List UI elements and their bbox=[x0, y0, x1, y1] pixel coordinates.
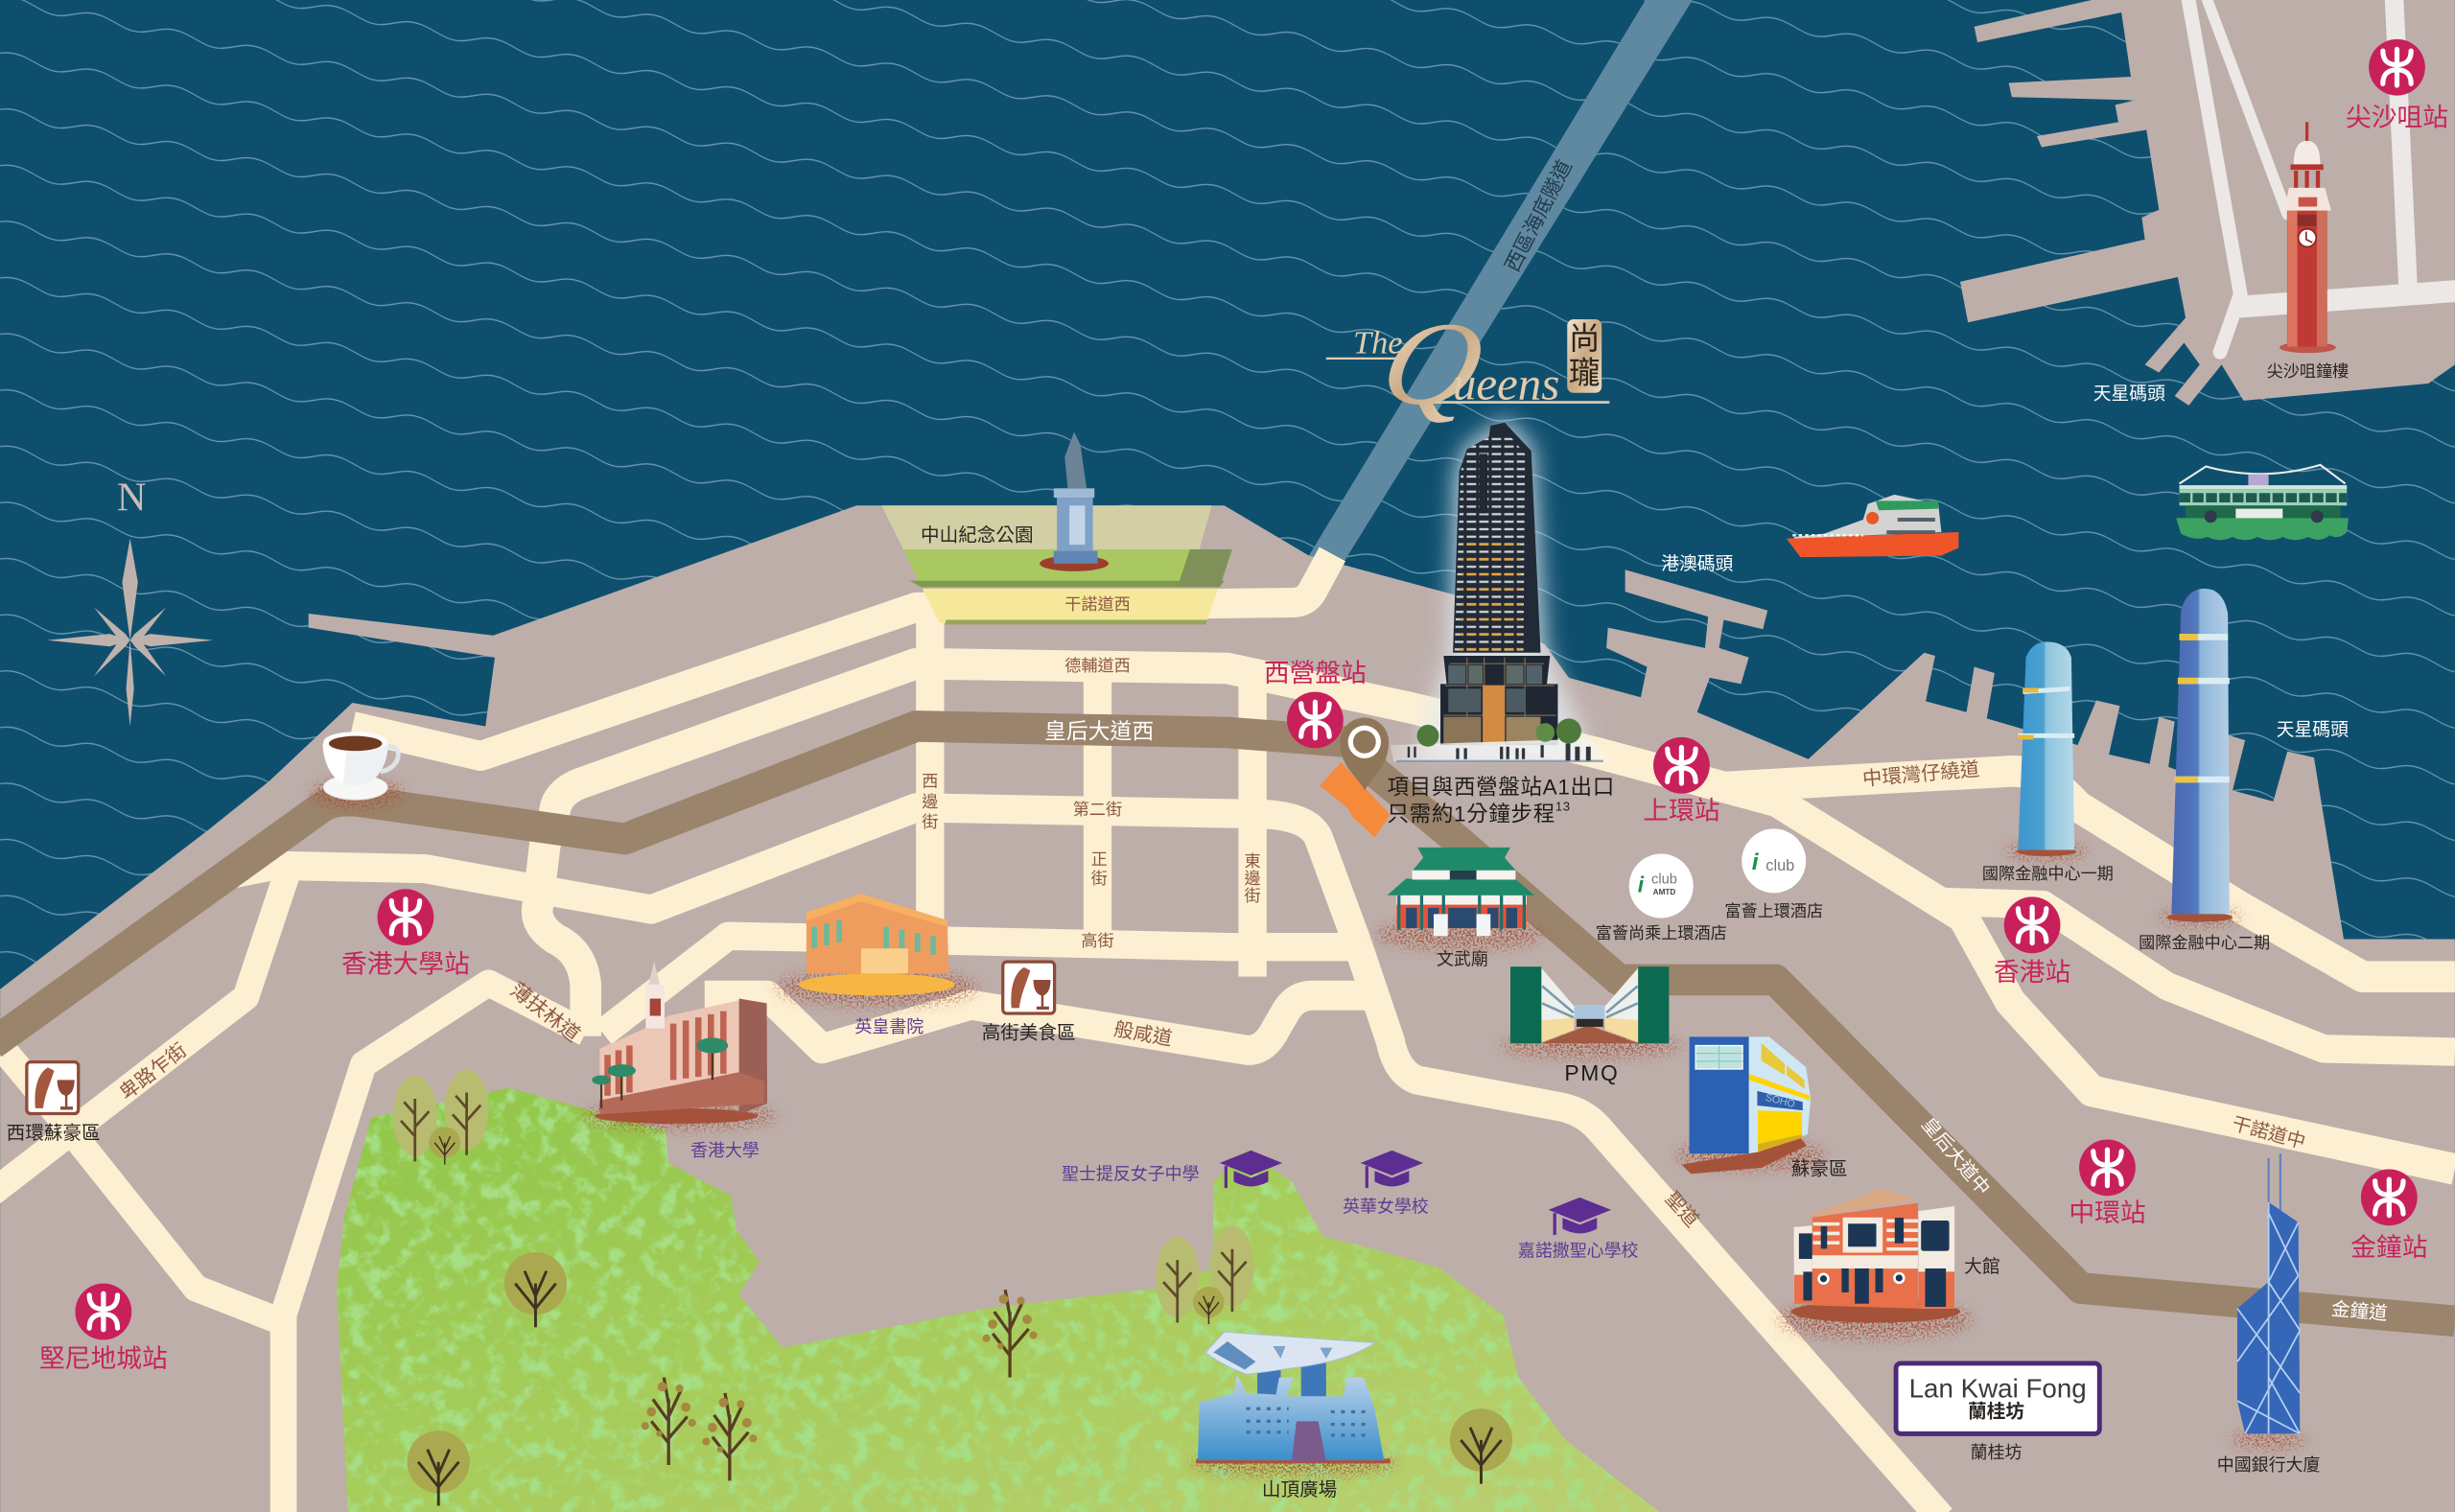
MTR station: Admiralty: 金鐘站 bbox=[2350, 1233, 2427, 1262]
landmark: IFC Two: 國際金融中心二期 bbox=[2139, 933, 2270, 952]
compass rose bbox=[47, 476, 213, 726]
landmark: Bank of China Tower: 中國銀行大廈 bbox=[2217, 1455, 2320, 1475]
landmark: Man Mo Temple: 文武廟 bbox=[1437, 950, 1488, 969]
tower: The Queens building bbox=[1417, 416, 1589, 752]
landmark: IFC One bbox=[1982, 641, 2114, 883]
landmark: Tsim Sha Tsui Clock Tower bbox=[2267, 122, 2349, 381]
landmark: IFC One: 國際金融中心一期 bbox=[1982, 864, 2114, 883]
road labels: 高街 bbox=[1081, 931, 1114, 950]
road labels: 正 bbox=[1091, 849, 1108, 869]
MTR station: Hong Kong: 香港站 bbox=[1994, 958, 2070, 987]
road labels: 干諾道西 bbox=[1064, 594, 1131, 614]
MTR station: Central: 中環站 bbox=[2069, 1198, 2146, 1227]
MTR station: Kennedy Town bbox=[39, 1284, 168, 1373]
landmark: Tai Kwun: 大館 bbox=[1964, 1256, 2000, 1276]
school: St Stephen's Girls: 聖士提反女子中學 bbox=[1062, 1164, 1200, 1183]
road network bbox=[0, 554, 2455, 1512]
hotel logo: iclub Sheung Wan: i bbox=[1752, 849, 1760, 875]
callout: walking distance bbox=[1388, 776, 1615, 826]
road labels: 西 bbox=[922, 772, 938, 791]
logo: The Queens 尚瓏: The bbox=[1353, 325, 1402, 361]
road labels: 皇后大道西 bbox=[1044, 718, 1154, 743]
place labels on water and land: 天星碼頭 bbox=[2093, 383, 2165, 403]
landmark: SoHo: 蘇豪區 bbox=[1791, 1158, 1847, 1179]
MTR station: Sai Ying Pun bbox=[1264, 659, 1367, 748]
road labels: 卑路乍街 bbox=[116, 1039, 191, 1105]
landmark: Tsim Sha Tsui Clock Tower: 尖沙咀鐘樓 bbox=[2267, 361, 2349, 381]
MTR station: Kennedy Town: 堅尼地城站 bbox=[39, 1344, 168, 1373]
logo sign: Lan Kwai Fong bbox=[1896, 1363, 2099, 1462]
road labels: 皇后大道中 bbox=[1917, 1114, 1994, 1199]
MTR station: HKU bbox=[341, 889, 470, 979]
road labels: 干諾道中 bbox=[2230, 1113, 2307, 1153]
road labels: 西區海底隧道 bbox=[1501, 156, 1577, 275]
western harbour tunnel band bbox=[1309, 0, 1693, 572]
hotel logo: iclub AMTD: AMTD bbox=[1653, 888, 1675, 896]
icon: SoHo West food area: 西環蘇豪區 bbox=[7, 1123, 101, 1144]
statue: Sun Yat Sen bbox=[1040, 432, 1109, 571]
school: Sacred Heart Canossian bbox=[1518, 1198, 1639, 1260]
MTR station: Admiralty bbox=[2350, 1169, 2427, 1262]
hotel logo: iclub AMTD: 富薈尚乘上環酒店 bbox=[1596, 923, 1727, 942]
icon: High Street food area bbox=[982, 962, 1076, 1043]
land: Hong Kong Island bbox=[0, 505, 2455, 1512]
hotel logo: iclub AMTD bbox=[1596, 854, 1727, 942]
Sun Yat Sen park strips bbox=[881, 505, 1232, 624]
MTR station: Sheung Wan bbox=[1643, 737, 1720, 826]
landmark: Bank of China Tower bbox=[2217, 1153, 2320, 1475]
landmark: Peak Galleria: 山頂廣場 bbox=[1262, 1479, 1337, 1500]
MTR station: Central bbox=[2069, 1139, 2146, 1227]
icon: High Street food area: 高街美食區 bbox=[982, 1022, 1076, 1043]
boat: Star Ferry bbox=[2176, 465, 2349, 540]
road labels: 街 bbox=[1091, 869, 1108, 888]
landmark: King's College bbox=[777, 894, 977, 1036]
icon: coffee cup bbox=[310, 732, 404, 809]
landmark: PMQ: PMQ bbox=[1564, 1060, 1619, 1085]
landmark: Peak Galleria bbox=[1190, 1332, 1396, 1500]
hotel logo: iclub AMTD: club bbox=[1651, 872, 1677, 887]
road labels: 第二街 bbox=[1073, 800, 1122, 819]
callout: walking distance: 13 bbox=[1555, 799, 1571, 813]
hotel logo: iclub Sheung Wan: club bbox=[1765, 857, 1794, 874]
road labels: 街 bbox=[922, 812, 938, 831]
road labels bbox=[116, 156, 2389, 1325]
road labels: 邊 bbox=[922, 792, 938, 811]
landmark: SoHo bbox=[1675, 1036, 1847, 1179]
logo: The Queens 尚瓏 bbox=[1326, 297, 1609, 430]
logo: The Queens 尚瓏: Q bbox=[1370, 297, 1495, 430]
landmark: University of Hong Kong bbox=[582, 961, 777, 1160]
project site marker bbox=[1320, 718, 1391, 837]
landmark: SoHo: SOHO bbox=[1765, 1092, 1796, 1110]
landmark: King's College: 英皇書院 bbox=[855, 1017, 924, 1036]
road labels: 聖道 bbox=[1661, 1188, 1703, 1231]
landmark: Man Mo Temple bbox=[1376, 848, 1545, 969]
MTR station: HKU: 香港大學站 bbox=[341, 950, 470, 979]
place labels on water and land: 中山紀念公園 bbox=[921, 523, 1034, 546]
Queen's Road brown main road bbox=[0, 726, 2455, 1321]
school: St Stephen's Girls bbox=[1062, 1151, 1282, 1188]
compass rose: N bbox=[117, 476, 147, 521]
icon: SoHo West food area bbox=[7, 1062, 101, 1144]
place labels on water and land: 天星碼頭 bbox=[2277, 719, 2349, 739]
school: Ying Wa Girls: 英華女學校 bbox=[1343, 1198, 1429, 1217]
landmark: Tai Kwun bbox=[1779, 1189, 2000, 1339]
road labels: 金鐘道 bbox=[2330, 1299, 2389, 1325]
land: Kowloon peninsula bbox=[1960, 0, 2455, 406]
hotel logo: iclub Sheung Wan bbox=[1724, 828, 1823, 920]
logo sign: Lan Kwai Fong: 蘭桂坊 bbox=[1968, 1401, 2024, 1423]
road labels: 般咸道 bbox=[1112, 1018, 1174, 1050]
landmark: PMQ bbox=[1500, 966, 1681, 1085]
school: Ying Wa Girls bbox=[1343, 1151, 1429, 1217]
MTR station: Sheung Wan: 上環站 bbox=[1643, 797, 1720, 826]
road labels: 東 bbox=[1245, 851, 1261, 871]
callout: walking distance: 只需約1分鐘步程 bbox=[1388, 802, 1555, 826]
MTR station: Sai Ying Pun: 西營盤站 bbox=[1264, 659, 1367, 687]
landmark: IFC Two bbox=[2139, 589, 2270, 952]
MTR station: Hong Kong bbox=[1994, 896, 2070, 987]
boat: turbojet ferry bbox=[1787, 495, 1958, 557]
logo: The Queens 尚瓏: 瓏 bbox=[1569, 355, 1601, 390]
Kowloon roads bbox=[2187, 0, 2455, 352]
logo sign: Lan Kwai Fong: Lan Kwai Fong bbox=[1909, 1374, 2087, 1404]
place labels on water and land: 港澳碼頭 bbox=[1661, 553, 1734, 573]
logo: The Queens 尚瓏: ueens bbox=[1453, 357, 1559, 409]
plaza with trees and people bbox=[1391, 718, 1614, 762]
hotel logo: iclub AMTD: i bbox=[1638, 872, 1645, 896]
school: Sacred Heart Canossian: 嘉諾撒聖心學校 bbox=[1518, 1241, 1639, 1260]
callout: walking distance: 項目與西營盤站A1出口 bbox=[1388, 776, 1615, 800]
landmark: University of Hong Kong: 香港大學 bbox=[690, 1141, 760, 1160]
MTR station: Tsim Sha Tsui: 尖沙咀站 bbox=[2346, 103, 2448, 131]
logo sign: Lan Kwai Fong: 蘭桂坊 bbox=[1971, 1443, 2022, 1462]
road labels: 中環灣仔繞道 bbox=[1861, 758, 1980, 790]
road labels: 薄扶林道 bbox=[506, 978, 584, 1046]
hotel logo: iclub Sheung Wan: 富薈上環酒店 bbox=[1724, 901, 1823, 920]
park: green hillside bbox=[314, 1080, 1691, 1512]
MTR station: Tsim Sha Tsui bbox=[2346, 39, 2448, 131]
road labels: 德輔道西 bbox=[1064, 656, 1131, 675]
place labels on water and land bbox=[921, 383, 2349, 739]
logo: The Queens 尚瓏: 尚 bbox=[1569, 320, 1601, 356]
trees on the hillside bbox=[393, 1069, 1512, 1505]
road labels: 邊 bbox=[1245, 869, 1261, 888]
road labels: 街 bbox=[1245, 886, 1261, 905]
